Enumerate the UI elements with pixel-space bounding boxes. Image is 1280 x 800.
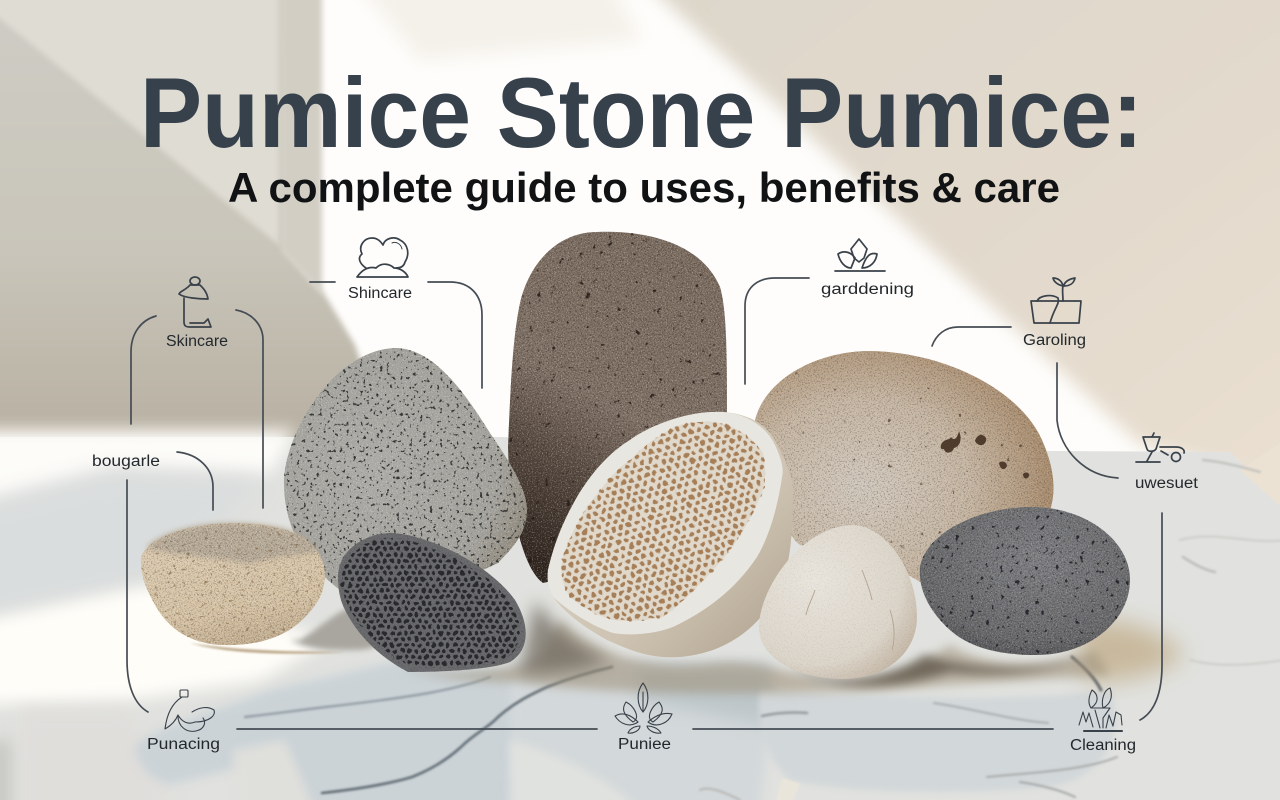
icon: bottle <box>179 277 211 327</box>
stone: dark grey oval with honeycomb pores <box>338 533 526 672</box>
stone: tall brown pumice <box>508 232 727 583</box>
connector: gardening arc <box>745 278 809 384</box>
connector: bougarle arc <box>177 452 213 510</box>
label: bougarle: bougarle <box>92 453 160 470</box>
connector: Garoling down arc <box>1057 363 1118 478</box>
connector: Shincare left dash <box>310 281 335 283</box>
callout: Cleaning <box>1070 688 1136 754</box>
label: gardening: garddening <box>821 281 914 298</box>
icon: cloud with stone <box>357 238 408 277</box>
connector: bottom left line <box>237 728 597 730</box>
icon: grass and plant <box>1079 688 1122 731</box>
label: Punacing: Punacing <box>147 736 220 753</box>
subtitle: A complete guide to uses, benefits & care <box>228 164 1060 211</box>
stone: cut pumice half with porous face <box>548 412 793 657</box>
stone: dark grey pebble <box>920 507 1130 655</box>
label: Skincare: Skincare <box>166 333 228 350</box>
connector: uwesuet down arc <box>1140 513 1162 720</box>
callout: Garoling plant pot <box>1023 278 1086 349</box>
connector: Skincare right arc <box>236 310 263 508</box>
cut stone honeycomb holes <box>561 422 765 621</box>
cut stone porous face <box>561 422 765 621</box>
marble veins <box>245 460 1280 800</box>
connector: left long arc <box>127 480 148 712</box>
icon: plant pot <box>1031 278 1081 323</box>
connector: Skincare left arc <box>131 316 156 424</box>
label: Shincare: Shincare <box>348 285 412 302</box>
icon: garden cart <box>1136 433 1184 462</box>
cut stone outer body <box>548 412 793 657</box>
connector: Shincare right arc <box>428 282 482 388</box>
icon: perfume bottle with leaf <box>165 690 214 731</box>
stone: white pebble <box>759 525 917 679</box>
callout: Shincare cloud <box>348 238 412 302</box>
callout: gardening leaves <box>821 239 914 298</box>
callout: Skincare bottle <box>166 277 228 350</box>
title: Pumice Stone Pumice: <box>140 57 1143 168</box>
stone: beige boulder <box>755 351 1054 600</box>
connector: bottom right line <box>693 728 1053 730</box>
background: sunlit wall <box>0 0 1280 500</box>
callout: Punacing <box>147 690 220 753</box>
callout: Puniee <box>615 683 672 753</box>
label: Puniee: Puniee <box>618 736 671 753</box>
connector: Garoling left arc <box>932 327 1011 346</box>
cut stone white face rim <box>548 412 783 634</box>
contact shadows <box>190 600 1110 693</box>
icon: leaf sprig <box>615 683 672 733</box>
callout: uwesuet tool <box>1135 433 1199 492</box>
icon: lotus leaves <box>835 239 885 271</box>
label: uwesuet: uwesuet <box>1135 475 1199 492</box>
stone: tan cylinder <box>141 523 325 645</box>
label: Garoling: Garoling <box>1023 332 1086 349</box>
background: marble table <box>0 430 1280 800</box>
label: Cleaning: Cleaning <box>1070 737 1136 754</box>
stone: grey triangular pumice <box>284 348 527 590</box>
